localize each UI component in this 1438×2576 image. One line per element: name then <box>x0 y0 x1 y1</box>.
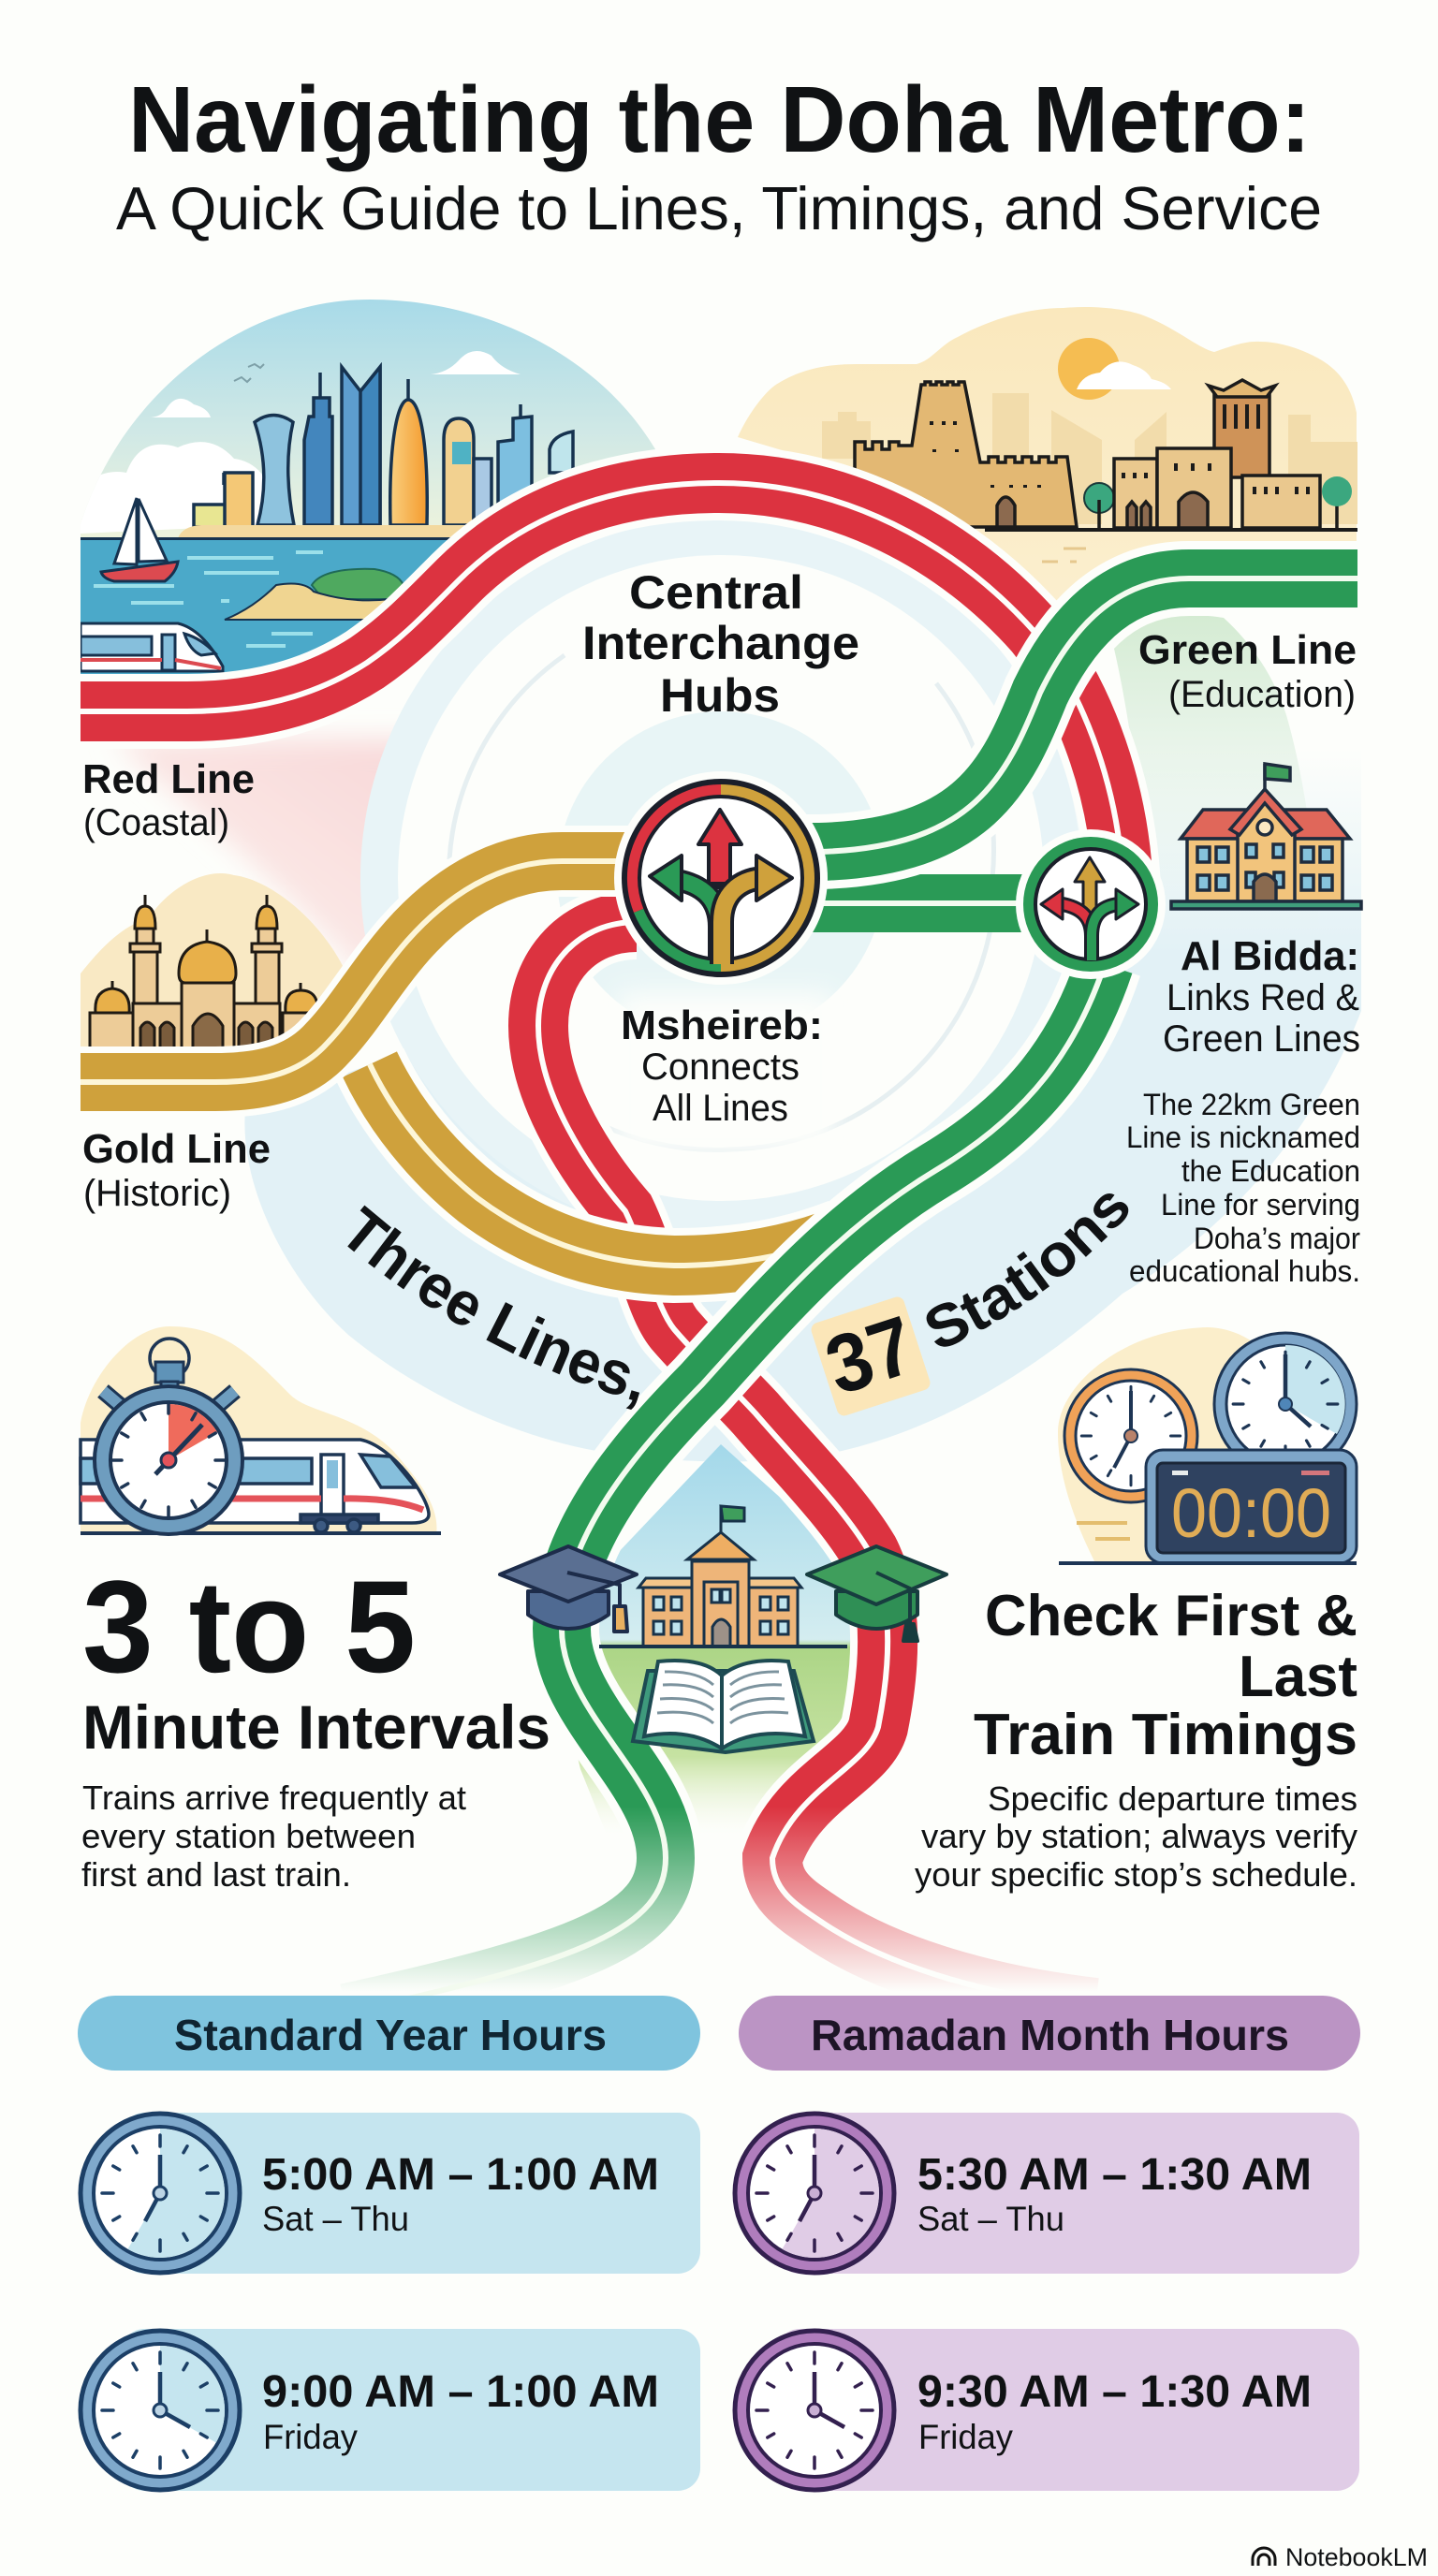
icon: clock <box>81 2114 240 2273</box>
line: red lower loop <box>538 922 1095 2008</box>
line: gold lower branch <box>370 1064 843 1266</box>
heading pill: Standard Year Hours <box>174 2011 607 2059</box>
icon: clouds and birds <box>81 351 521 534</box>
hub: Al Bidda interchange <box>1016 829 1166 979</box>
background: pale rings behind the network <box>112 518 1361 1462</box>
badge: 37: 37 <box>814 1297 926 1412</box>
label: Msheireb: All Lines <box>653 1088 788 1129</box>
icon: train <box>81 623 223 671</box>
title: Navigating the Doha Metro: <box>128 67 1311 172</box>
text: Green Line note <box>1126 1088 1360 1288</box>
text: timings description <box>915 1779 1357 1894</box>
card: Saturday to Thursday <box>81 2113 700 2274</box>
label: gold line <box>82 1126 271 1214</box>
scene: school and book grounds <box>552 1444 899 1863</box>
line: green hub link <box>721 874 1095 932</box>
scene: clocks and departure board <box>1058 1327 1357 1565</box>
icon: sun and cloud <box>1058 338 1171 400</box>
text: timings description: vary by station; always verify <box>921 1817 1357 1855</box>
label: green line: Green Line <box>1138 627 1357 673</box>
icon: clock <box>735 2331 894 2490</box>
icon: towers <box>194 367 573 527</box>
text: Green Line note: Line for serving <box>1161 1188 1360 1222</box>
scene: stopwatch and train <box>81 1326 441 1535</box>
card: Saturday to Thursday: Sat – Thu <box>262 2200 409 2238</box>
text: Green Line note: Doha’s major <box>1194 1222 1360 1255</box>
icon: stopwatch <box>95 1339 242 1534</box>
text: timings description: Specific departure times <box>988 1779 1357 1818</box>
card: Saturday to Thursday: Sat – Thu <box>917 2200 1064 2238</box>
icon: campus school <box>599 1506 847 1647</box>
text: intervals description: every station between <box>81 1817 416 1855</box>
card: Friday: Friday <box>918 2418 1013 2456</box>
icon: minarets and domes <box>90 895 322 1050</box>
icon: digital board <box>1146 1450 1357 1563</box>
text: Green Line note: the Education <box>1181 1154 1360 1188</box>
stat: train intervals: Minute Intervals <box>82 1692 550 1762</box>
icon: orange clock <box>1064 1369 1197 1502</box>
icon: fort <box>855 382 1077 527</box>
icon: trees <box>1084 476 1352 530</box>
icon: train <box>81 1440 429 1532</box>
icon: clock <box>81 2331 240 2490</box>
icon: ground strip <box>178 525 468 538</box>
label: Al Bidda: Links Red & <box>1167 977 1359 1018</box>
label: Msheireb: Connects <box>641 1046 800 1088</box>
card: Friday: 9:00 AM – 1:00 AM <box>262 2367 659 2417</box>
label: Al Bidda <box>1163 933 1360 1060</box>
card: Friday: 9:30 AM – 1:30 AM <box>917 2367 1312 2417</box>
card: Saturday to Thursday: 5:30 AM – 1:30 AM <box>917 2150 1312 2200</box>
card: Friday <box>735 2329 1359 2491</box>
heading pill <box>78 1996 700 2071</box>
stat: train intervals: 3 to 5 <box>82 1553 416 1700</box>
icon: graduation cap green <box>807 1546 946 1641</box>
icon: open book <box>633 1661 814 1752</box>
card: Friday: Friday <box>263 2418 358 2456</box>
icon: blue clock <box>1214 1333 1357 1475</box>
text: timings description: your specific stop’s schedule. <box>915 1855 1357 1894</box>
scene: coastal skyline <box>81 300 655 674</box>
text: intervals description: first and last train. <box>81 1855 351 1894</box>
label: red line: (Coastal) <box>83 802 229 843</box>
scene: historic fort and souq <box>738 307 1357 618</box>
label: Al Bidda: Green Lines <box>1163 1018 1360 1060</box>
label: red line: Red Line <box>82 756 255 802</box>
hub: Msheireb interchange <box>614 771 828 985</box>
footer: NotebookLM mark: NotebookLM <box>1285 2543 1428 2571</box>
panel: standard year hours <box>78 1996 700 2491</box>
callout: first and last train: Last <box>1239 1645 1357 1709</box>
stat: train intervals <box>81 1553 550 1894</box>
icon: digital board: 00:00 <box>1171 1474 1331 1552</box>
callout: first and last train: Train Timings <box>974 1703 1357 1767</box>
card: Friday <box>81 2329 700 2491</box>
icon: Green Line school <box>1171 764 1361 909</box>
icon: island <box>225 569 404 620</box>
heading pill: Ramadan Month Hours <box>811 2011 1289 2059</box>
scene: mosque <box>81 873 346 1058</box>
icon: sea <box>81 540 448 674</box>
icon: three-way arrows <box>650 810 792 964</box>
text: intervals description <box>81 1778 466 1894</box>
label: Msheireb <box>621 1003 823 1129</box>
curved label: Stations: Stations <box>927 1193 1129 1347</box>
label: Msheireb: Msheireb: <box>621 1003 823 1048</box>
line: gold main <box>56 861 646 1082</box>
label: gold line: (Historic) <box>83 1173 231 1214</box>
label: gold line: Gold Line <box>82 1126 271 1172</box>
text: Green Line note: educational hubs. <box>1129 1254 1360 1288</box>
callout: first and last train: Check First & <box>985 1584 1357 1648</box>
line: green upper <box>721 578 1386 852</box>
icon: graduation cap navy <box>500 1546 637 1632</box>
label: green line: (Education) <box>1168 674 1356 715</box>
text: Green Line note: The 22km Green <box>1143 1088 1360 1121</box>
callout: first and last train <box>915 1584 1357 1894</box>
label: hub heading: Interchange <box>582 617 859 669</box>
subtitle: A Quick Guide to Lines, Timings, and Service <box>116 174 1322 242</box>
label: red line <box>82 756 255 843</box>
heading pill <box>739 1996 1360 2071</box>
icon: clock <box>735 2114 894 2273</box>
line: red upper <box>56 483 1123 889</box>
curved label: Three Lines: Three Lines, <box>347 1206 640 1410</box>
label: hub heading: Hubs <box>660 669 780 722</box>
label: hub heading <box>582 566 859 722</box>
text: intervals description: Trains arrive frequently at <box>82 1778 466 1817</box>
card: Saturday to Thursday: 5:00 AM – 1:00 AM <box>262 2150 659 2200</box>
card: Saturday to Thursday <box>735 2113 1359 2274</box>
line: green lower <box>346 964 1105 2012</box>
label: hub heading: Central <box>629 566 803 619</box>
label: green line <box>1138 627 1357 715</box>
icon: souq buildings <box>1114 380 1320 528</box>
icon: distant buildings <box>822 393 1357 524</box>
icon: sailboat <box>101 498 178 581</box>
label: Al Bidda: Al Bidda: <box>1181 933 1359 979</box>
panel: Ramadan month hours <box>735 1996 1360 2491</box>
icon: three-way arrows <box>1041 857 1138 960</box>
text: Green Line note: Line is nicknamed <box>1126 1120 1360 1154</box>
